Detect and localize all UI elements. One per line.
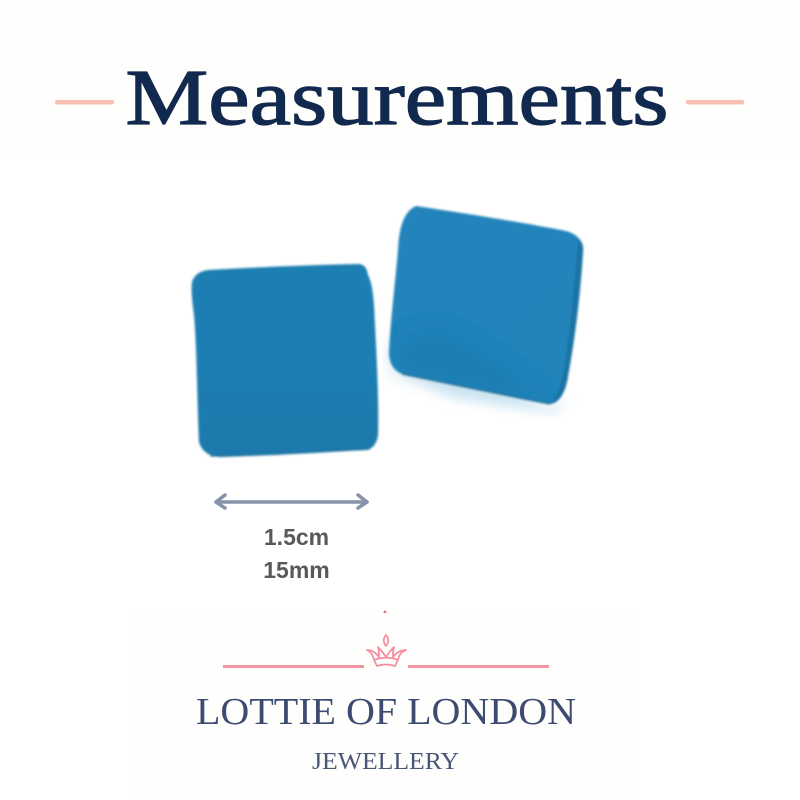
logo name: LOTTIE OF LONDON — [196, 691, 576, 733]
logo panel — [130, 610, 640, 800]
left rule — [223, 665, 364, 668]
header band — [0, 0, 800, 160]
right earring shaded fold — [394, 331, 548, 400]
measurement labels — [263, 524, 330, 583]
logo subtitle: JEWELLERY — [312, 749, 459, 775]
right earring dark edge — [550, 238, 583, 404]
right earring shadow — [410, 378, 570, 414]
right rule — [408, 665, 549, 668]
small dot — [383, 610, 387, 613]
left title dash — [55, 100, 114, 104]
icon: crown — [367, 635, 406, 666]
earrings photo — [192, 206, 583, 457]
right earring — [389, 206, 583, 404]
title text: Measurements — [126, 55, 668, 142]
measurement arrow — [216, 495, 367, 508]
left earring bottom edge — [210, 449, 370, 456]
left earring — [192, 264, 378, 457]
millimetres: 15mm — [263, 557, 330, 583]
title — [55, 55, 744, 142]
right title dash — [686, 100, 744, 104]
centimetres: 1.5cm — [264, 524, 329, 550]
logo background — [130, 610, 640, 800]
